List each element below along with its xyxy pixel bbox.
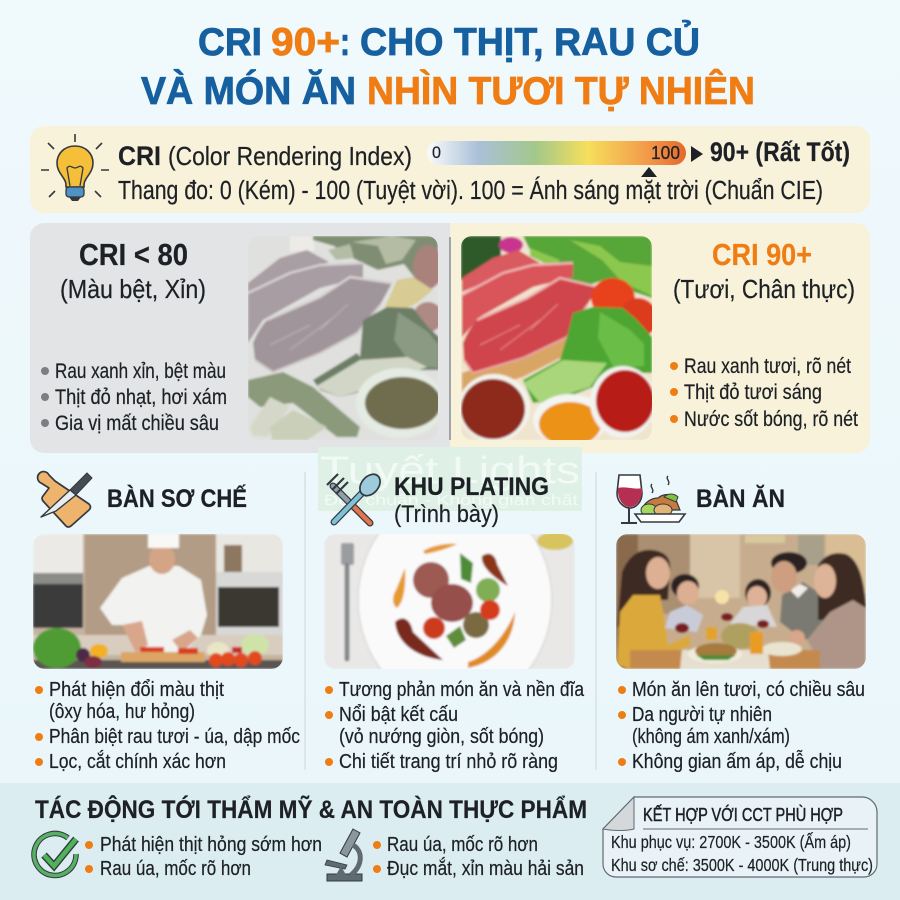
list: prep table: Lọc, cắt chính xác hơn xyxy=(49,750,226,773)
list: dining table: Không gian ấm áp, dễ chịu xyxy=(632,750,842,773)
list: CRI 90+: Thịt đỏ tươi sáng xyxy=(684,381,822,404)
panel: dining table xyxy=(616,475,866,773)
list: plating area: Nổi bật kết cấu xyxy=(339,704,458,726)
list: plating area: Chi tiết trang trí nhỏ rõ ràng xyxy=(339,751,558,773)
CRI colour scale xyxy=(427,141,703,177)
photo: vivid food xyxy=(458,236,657,446)
photo: dull food xyxy=(248,236,444,440)
icon: cutting board and knife xyxy=(38,472,92,527)
panel: impact footer xyxy=(0,783,900,900)
callout: CCT note: Khu phục vụ: 2700K - 3500K (Ấm áp) xyxy=(611,831,851,852)
watermark: Đèn chuẩn - Không gian chất xyxy=(324,492,579,509)
CRI colour scale: 0 xyxy=(432,143,441,162)
list: dining table: Da người tự nhiên xyxy=(632,704,772,726)
icon: check mark xyxy=(34,833,76,875)
photo: chef xyxy=(33,534,283,669)
title: CHO THỊT, RAU CỦ xyxy=(360,20,700,64)
icon: light bulb xyxy=(41,134,109,201)
title: 90+ xyxy=(271,21,340,64)
rating label: 90+ (Rất Tốt) xyxy=(710,137,850,167)
callout: CCT note xyxy=(603,797,877,877)
watermark: Tuyết Lights xyxy=(320,450,580,492)
list: CRI below 80: Thịt đỏ nhạt, hơi xám xyxy=(55,386,227,409)
list: impact right xyxy=(373,834,584,880)
list: dining table: (không ám xanh/xám) xyxy=(632,726,790,748)
list: impact right: Đục mắt, xỉn màu hải sản xyxy=(387,857,584,880)
list: prep table xyxy=(35,679,300,773)
list: impact left: Phát hiện thịt hỏng sớm hơn xyxy=(100,834,322,856)
title xyxy=(141,20,755,113)
panel: comparison xyxy=(30,223,870,453)
panel: plating area xyxy=(324,470,585,773)
heading: plating area: KHU PLATING xyxy=(394,473,549,501)
heading: CRI 90+: (Tươi, Chân thực) xyxy=(673,274,855,304)
icon: wine glass and dish xyxy=(617,475,685,523)
list: plating area xyxy=(325,679,585,773)
callout: CCT note: KẾT HỢP VỚI CCT PHÙ HỢP xyxy=(643,804,843,825)
CRI colour scale: 100 xyxy=(651,143,680,163)
list: impact left xyxy=(85,834,322,880)
heading: plating area: (Trình bày) xyxy=(394,501,499,528)
heading: CRI 90+ xyxy=(673,237,855,304)
heading: CRI below 80: (Màu bệt, Xỉn) xyxy=(60,274,206,304)
list: plating area: (vỏ nướng giòn, sốt bóng) xyxy=(339,726,544,748)
list: CRI 90+: Rau xanh tươi, rõ nét xyxy=(684,355,851,378)
watermark xyxy=(318,447,582,511)
list: prep table: Phân biệt rau tươi - úa, dập mốc xyxy=(49,726,300,748)
heading: CRI below 80: CRI < 80 xyxy=(79,237,188,272)
list: CRI below 80: Rau xanh xỉn, bệt màu xyxy=(55,360,226,383)
list: dining table: Món ăn lên tươi, có chiều sâu xyxy=(632,679,865,701)
list: prep table: Phát hiện đổi màu thịt xyxy=(49,679,224,701)
title: NHÌN TƯƠI TỰ NHIÊN xyxy=(367,69,755,113)
heading: CRI below 80 xyxy=(60,237,206,304)
heading: CRI 90+: CRI 90+ xyxy=(712,237,812,272)
panel: CRI definition xyxy=(30,126,870,213)
list: prep table: (ôxy hóa, hư hỏng) xyxy=(49,701,195,723)
heading: impact: TÁC ĐỘNG TỚI THẨM MỸ & AN TOÀN THỰC PHẨM xyxy=(35,794,587,824)
heading: plating area xyxy=(394,473,549,528)
list: impact right: Rau úa, mốc rõ hơn xyxy=(387,834,538,856)
column dividers xyxy=(305,472,596,770)
list: CRI below 80 xyxy=(41,360,227,435)
list: CRI 90+: Nước sốt bóng, rõ nét xyxy=(684,408,858,431)
panel: prep table xyxy=(33,472,300,773)
title: CRI xyxy=(198,21,262,64)
photo: family dinner xyxy=(616,534,866,669)
list: CRI 90+ xyxy=(670,355,858,431)
heading: prep table: BÀN SƠ CHẾ xyxy=(107,484,247,513)
heading: dining table: BÀN ĂN xyxy=(696,484,785,513)
list: impact left: Rau úa, mốc rõ hơn xyxy=(100,858,251,880)
list: plating area: Tương phản món ăn và nền đĩa xyxy=(339,679,585,701)
CRI heading: (Color Rendering Index) xyxy=(168,141,412,171)
photo: plated dish xyxy=(324,534,575,669)
title: VÀ MÓN ĂN xyxy=(141,69,356,113)
icon: fork and spoon xyxy=(327,470,384,523)
CRI heading: CRI xyxy=(118,141,161,171)
list: CRI below 80: Gia vị mất chiều sâu xyxy=(55,412,219,435)
title: : xyxy=(340,21,350,64)
icon: microscope xyxy=(325,829,362,881)
list: dining table xyxy=(618,679,865,773)
